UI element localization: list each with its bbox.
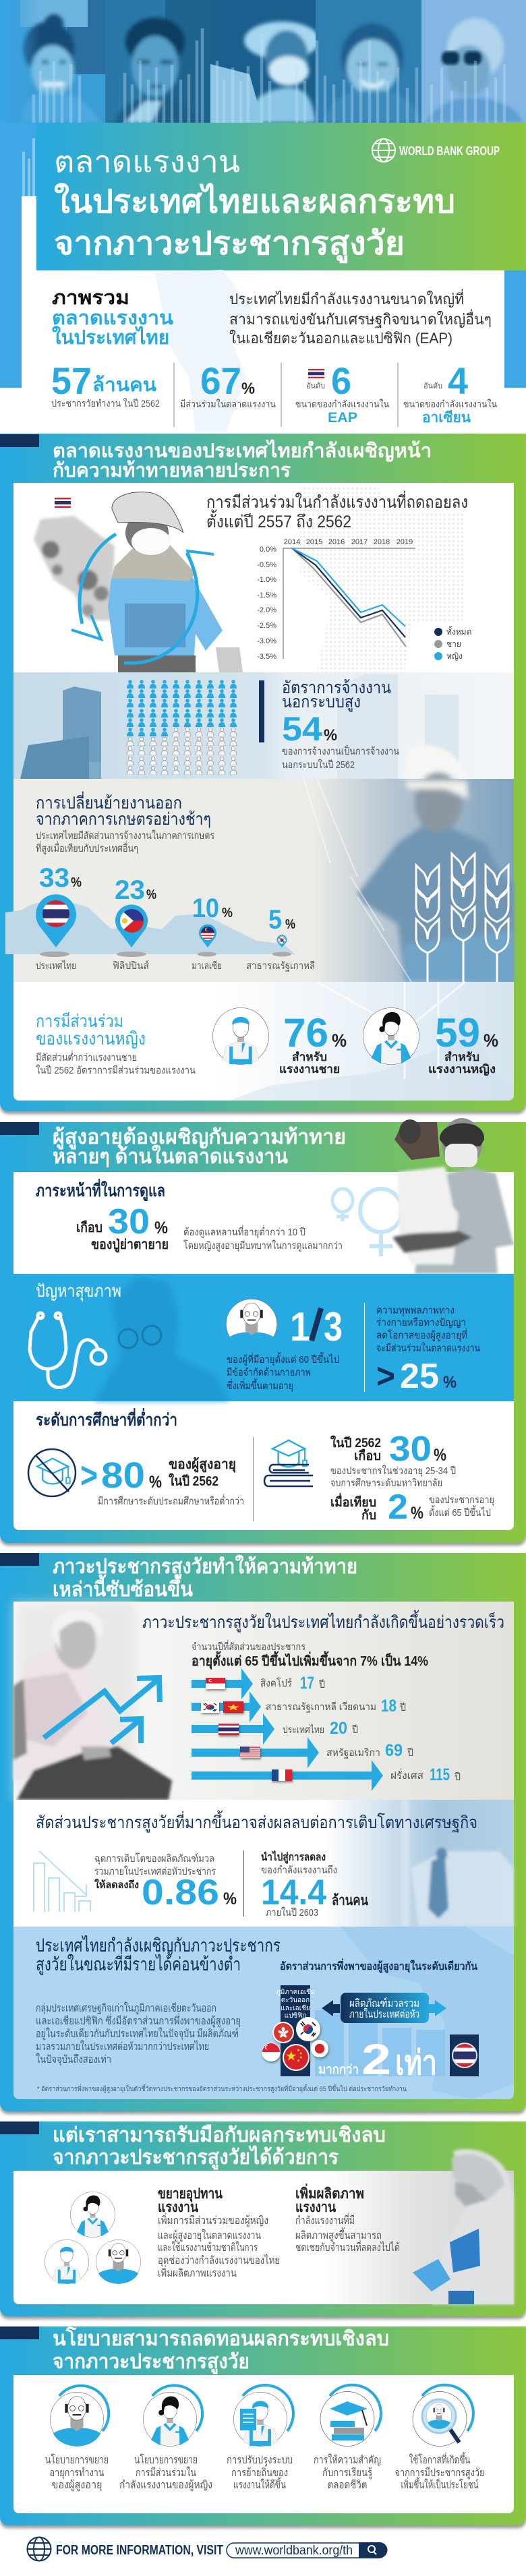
- stat: rank 6 in EAP: EAP: [328, 410, 357, 426]
- policy: women's participation: การมีส่วนร่วมใน: [136, 2466, 196, 2479]
- informal employment text: [282, 678, 399, 771]
- stat: nearly 30% of grandparents: เกือบ: [76, 1220, 103, 1235]
- pin: Korea 5%: %: [285, 917, 295, 932]
- search pill: www.worldbank.org/th: [235, 2544, 353, 2558]
- panel: lower education: ระดับการศึกษาที่ต่ำกว่า: [36, 1408, 177, 1430]
- stat: male 76%: 76: [283, 1010, 328, 1055]
- ageing subtitle: จำนวนปีที่สัดส่วนของประชากร: [192, 1639, 305, 1653]
- section heading: ผู้สูงอายุต้องเผชิญกับความท้าทาย: [53, 1126, 346, 1150]
- policy: improve migration: การย้ายถิ่นของ: [231, 2465, 288, 2479]
- icon: wheat stalks: [416, 854, 508, 982]
- comparison graphic: GDP per capita 2x: มากกว่า: [318, 2063, 359, 2077]
- overview heading: ตลาดแรงงาน: [52, 308, 173, 329]
- stat: 67 percent: [180, 359, 276, 409]
- stat: workforce down 14.4 million: 14.4: [261, 1873, 326, 1912]
- arrow row: Korea and Vietnam 18 years: [192, 1691, 406, 1722]
- text: expand labour supply: และผู้สูงอายุในตลาดแรงงาน: [158, 2229, 261, 2242]
- stat: 30% vs 2%: ในปี 2562: [330, 1435, 381, 1451]
- informal employment text: ของการจ้างงานเป็นการจ้างงาน: [282, 744, 399, 757]
- section frame: policies: [0, 2326, 526, 2525]
- pin: Malaysia 10%: มาเลเซีย: [192, 960, 222, 972]
- text: expand labour supply: และใช้แรงงานข้ามชาติในการ: [158, 2241, 258, 2254]
- stat: 30% vs 2%: %: [411, 1504, 423, 1523]
- body text: และเอเชียแปซิฟิก ซึ่งมีอัตราส่วนการพึ่งพาของผู้สูงอายุ: [36, 2013, 241, 2028]
- stat: 30% vs 2%: ของประชากรอายุ: [429, 1494, 494, 1506]
- comparison graphic: GDP per capita 2x: เท่า: [395, 2044, 437, 2082]
- agriculture text: จากภาคการเกษตรอย่างช้าๆ: [36, 810, 211, 829]
- section frame: ageing makes challenges more complex: [0, 1553, 526, 2111]
- ageing subtitle: [192, 1639, 428, 1670]
- map watermark: [155, 270, 253, 432]
- icon: no graduation cap: [28, 1449, 76, 1496]
- footer: FOR MORE INFORMATION, VISIT: [56, 2543, 223, 2558]
- pin: Thailand 33%: %: [71, 875, 82, 890]
- chart legend: [434, 626, 471, 661]
- policy: extend working age: นโยบายการขยาย: [45, 2453, 109, 2466]
- stat: over 80%: [80, 1455, 244, 1507]
- chart title: การมีส่วนร่วมในกำลังแรงงานที่ถดถอยลง: [206, 490, 468, 512]
- photo: masked woman with hat: [210, 0, 320, 123]
- informal employment text: นอกระบบสูง: [282, 693, 361, 712]
- section heading: ตลาดแรงงานของประเทศไทยกำลังเผชิญหน้า: [53, 439, 432, 463]
- line chart: -3.5%: [257, 653, 276, 661]
- line chart: 2018: [374, 538, 390, 546]
- policy: extend working age: [45, 2386, 109, 2492]
- panel: care duties: ต้องดูแลหลานที่อายุต่ำกว่า 10 ปี: [183, 1225, 305, 1239]
- stat: one third: ซึ่งเพิ่มขึ้นตามอายุ: [227, 1378, 293, 1393]
- arrow row: Korea and Vietnam 18 years: 18: [381, 1697, 397, 1716]
- title text: [54, 146, 455, 264]
- text: expand labour supply: แรงงาน: [158, 2200, 199, 2215]
- policy: improve migration: การปรับปรุงระบบ: [227, 2455, 293, 2467]
- overview text: [229, 289, 492, 347]
- stat: 67 percent: 67: [200, 359, 241, 402]
- pin: Philippines 23%: %: [146, 887, 156, 902]
- section heading: กับความท้าทายหลายประการ: [53, 460, 291, 481]
- pin: Thailand 33%: 33: [39, 863, 69, 893]
- logo: World Bank Group: [372, 139, 500, 162]
- line chart: -1.0%: [257, 576, 276, 584]
- body text: [36, 2001, 241, 2066]
- panel: health problems: [13, 1274, 514, 1401]
- text: raise productivity: แรงงาน: [295, 2200, 337, 2215]
- panel: declining participation: [13, 483, 514, 672]
- policy: lifelong learning: การให้ความสำคัญ: [314, 2453, 381, 2466]
- line chart: -2.0%: [257, 606, 276, 614]
- stat: 30% vs 2%: 2: [388, 1488, 408, 1527]
- line chart: 2017: [351, 538, 368, 546]
- icons: woman, migrant worker, older man: [45, 2192, 141, 2284]
- section frame: responding to ageing: [0, 2121, 526, 2316]
- panel: care duties: โดยหญิงสูงอายุมีบทบาทในการดูแลมากกว่า: [183, 1239, 343, 1252]
- stat: female 59%: %: [484, 1030, 498, 1051]
- section heading: แต่เราสามารถรับมือกับผลกระทบเชิงลบ: [53, 2124, 386, 2146]
- stat: female 59%: สำหรับ: [444, 1051, 479, 1063]
- arrow row: Thailand 20 years: [192, 1714, 358, 1745]
- section heading: [53, 1554, 357, 1601]
- stat: 30% vs 2%: ของประชากรในช่วงอายุ 25-34 ปี: [330, 1465, 456, 1477]
- section heading: [53, 2326, 389, 2374]
- chart title: ตั้งแต่ปี 2557 ถึง 2562: [206, 509, 351, 531]
- agriculture text: [36, 791, 214, 854]
- stat: 57 million: 57: [51, 359, 92, 402]
- photo: elderly woman: [316, 0, 421, 123]
- policy: seize opportunities: เพิ่มขึ้นให้เป็นประโยชน์: [401, 2477, 479, 2491]
- icon: stethoscope: [30, 1313, 106, 1387]
- stat: female 59%: 59: [435, 1010, 480, 1055]
- stat: GDP growth 0.86%: %: [223, 1890, 237, 1908]
- stat: GDP growth 0.86%: รวมภายในประเทศต่อหัวประชากร: [94, 1865, 216, 1877]
- Thailand block: [450, 2035, 479, 2076]
- panel: lower education: [28, 1408, 494, 1527]
- arrow row: Singapore 17 years: ปี: [318, 1679, 325, 1691]
- stat: 57 million: ประชากรวัยทำงาน ในปี 2562: [51, 398, 160, 409]
- stat: rank 4 in ASEAN: [403, 359, 497, 426]
- stat: male 76%: %: [332, 1030, 347, 1051]
- section heading: ภาวะประชากรสูงวัยทำให้ความท้าทาย: [53, 1554, 357, 1579]
- stat: 30% vs 2%: จบการศึกษาระดับมหาวิทยาลัย: [330, 1477, 442, 1489]
- stat: 30% vs 2%: %: [434, 1446, 446, 1465]
- title banner: [36, 123, 526, 270]
- stat: workforce down 14.4 million: ล้านคน: [332, 1892, 369, 1908]
- panel: negative impact on growth: [13, 1800, 514, 1927]
- policy: women's participation: นโยบายการขยาย: [134, 2453, 198, 2466]
- text: raise productivity: [295, 2183, 400, 2254]
- stat: over 80%: ในปี 2562: [169, 1473, 218, 1489]
- stat: over 80%: มีการศึกษาระดับประถมศึกษาหรือต่ำกว่า: [98, 1494, 244, 1507]
- ageing subtitle: อายุตั้งแต่ 65 ปีขึ้นไปเพิ่มขึ้นจาก 7% เป็น 14%: [192, 1651, 428, 1670]
- text: expand labour supply: เพิ่มผลิตภาพแรงงาน: [158, 2265, 237, 2279]
- section heading: จากภาวะประชากรสูงวัยได้ด้วยการ: [53, 2145, 339, 2170]
- body text: ในปัจจุบันถึงสองเท่า: [36, 2053, 111, 2066]
- heading: [36, 1935, 281, 1975]
- policy: lifelong learning: [314, 2385, 381, 2491]
- stat: over 25%: [376, 1305, 480, 1396]
- stat: rank 6 in EAP: 6: [331, 359, 351, 402]
- icon: globe: [27, 2537, 51, 2561]
- icon: Thai flag: [55, 498, 71, 508]
- stat: 30% vs 2%: เกือบ: [354, 1448, 381, 1463]
- policy: lifelong learning: กับการเรียนรู้: [322, 2467, 372, 2480]
- stat: 30% vs 2%: 30: [389, 1430, 432, 1469]
- stat: over 80%: ของผู้สูงอายุ: [169, 1457, 236, 1473]
- stat: one third: ของผู้ที่มีอายุตั้งแต่ 60 ปีขึ้นไป: [227, 1352, 339, 1366]
- icon: falling bars: [34, 1851, 90, 1912]
- agriculture text: การเปลี่ยนย้ายงานออก: [36, 791, 182, 813]
- text: raise productivity: กำลังแรงงานที่มี: [295, 2213, 355, 2227]
- stat: rank 4 in ASEAN: 4: [448, 359, 468, 402]
- overview text: ประเทศไทยมีกำลังแรงงานขนาดใหญ่ที่: [229, 289, 464, 308]
- photo: cleanroom worker: [413, 2149, 514, 2304]
- section frame: challenges for older people: [0, 1122, 526, 1543]
- policy: seize opportunities: [395, 2385, 484, 2491]
- stat: GDP growth 0.86%: [94, 1852, 237, 1912]
- comparison graphic: GDP per capita 2x: และเอเชีย: [281, 2004, 310, 2012]
- title text: จากภาวะประชากรสูงวัย: [54, 226, 405, 264]
- agriculture text: ประเทศไทยมีสัดส่วนการจ้างงานในภาคการเกษตร: [36, 829, 214, 842]
- panel: care duties: [36, 1118, 516, 1274]
- stat: rank 4 in ASEAN: อันดับ: [423, 381, 442, 390]
- double arrow pill: [322, 1993, 446, 2023]
- stat: one third: มีข้อจำกัดด้านกายภาพ: [227, 1367, 311, 1378]
- photo: factory worker and car: [401, 1800, 514, 1927]
- policy: extend working age: อายุการทำงาน: [50, 2467, 105, 2480]
- stat: one third: 3: [324, 1304, 343, 1349]
- section heading: [53, 1126, 346, 1168]
- text: raise productivity: ผลิตภาพสูงขึ้นสามารถ: [295, 2227, 382, 2242]
- hero: photo band of five workers: [0, 0, 526, 196]
- stat: over 25%: ความทุพพลภาพทาง: [376, 1305, 455, 1317]
- stat: rank 6 in EAP: อันดับ: [306, 381, 325, 390]
- line chart: -2.5%: [257, 622, 276, 630]
- arrow row: USA 69 years: [192, 1737, 413, 1768]
- mountain backdrop: [5, 900, 295, 954]
- photo: elderly man with sunglasses: [421, 0, 526, 123]
- stat: 57 million: ล้านคน: [92, 374, 156, 395]
- stat: over 80%: %: [149, 1473, 162, 1492]
- section heading: นโยบายสามารถลดทอนผลกระทบเชิงลบ: [53, 2326, 389, 2350]
- overview heading: ภาพรวม: [52, 287, 129, 309]
- text: expand labour supply: อุดช่องว่างกำลังแรงงานของไทย: [158, 2254, 280, 2267]
- participation text: การมีส่วนร่วม: [36, 1011, 123, 1031]
- arrow row: USA 69 years: สหรัฐอเมริกา: [326, 1747, 380, 1759]
- stat: over 80%: 80: [101, 1455, 145, 1496]
- panel: ageing at low income: [13, 1927, 514, 2099]
- informal employment text: อัตราการจ้างงาน: [282, 678, 391, 697]
- comparison graphic: GDP per capita 2x: ภูมิภาคเอเชีย: [276, 1988, 315, 1996]
- panel: expand labour supply and productivity: [13, 2149, 514, 2304]
- photo: grandmother carrying child: [392, 1118, 516, 1274]
- overview heading: [52, 287, 173, 349]
- stat: over 25%: >: [376, 1357, 395, 1396]
- policy: improve migration: แรงงานให้ดีขึ้น: [233, 2477, 286, 2491]
- panel: health problems: ปัญหาสุขภาพ: [36, 1281, 121, 1301]
- stat: nearly 30% of grandparents: 30: [108, 1202, 150, 1241]
- section heading: จากภาวะประชากรสูงวัย: [53, 2351, 250, 2374]
- pin: Thailand 33%: [36, 863, 82, 972]
- photo: worker with fishing net: [34, 492, 243, 672]
- pin: Korea 5%: 5: [268, 905, 282, 935]
- photo: elderly farmer: [303, 773, 514, 982]
- body text: อยู่ในระดับเดียวกันกับประเทศไทยในปัจจุบัน มีผลิตภัณฑ์: [36, 2027, 239, 2041]
- policy: women's participation: กำลังแรงงานของผู้หญิง: [119, 2479, 212, 2492]
- pin: Philippines 23%: [113, 875, 156, 972]
- comparison graphic: GDP per capita 2x: แปซิฟิก: [285, 2012, 306, 2020]
- arrow row: USA 69 years: ปี: [407, 1747, 413, 1759]
- text: raise productivity: เพิ่มผลิตภาพ: [295, 2183, 364, 2202]
- arrow row: USA 69 years: 69: [385, 1741, 403, 1760]
- photo: elderly man in blue tint: [94, 1278, 229, 1401]
- stat: GDP growth 0.86%: ให้ลดลงถึง: [94, 1879, 139, 1891]
- line chart: [257, 538, 471, 661]
- comparison graphic: GDP per capita 2x: 2: [361, 2035, 391, 2084]
- line chart: 2015: [306, 538, 322, 546]
- participation text: ในปี 2562 อัตราการมีส่วนร่วมของแรงงาน: [36, 1064, 196, 1076]
- stat: over 25%: %: [443, 1373, 457, 1392]
- pin: Malaysia 10%: %: [222, 906, 233, 920]
- stat: workforce down 14.4 million: ของกำลังแรงงานถึง: [261, 1865, 337, 1876]
- stat: rank 6 in EAP: [295, 359, 389, 426]
- stat: 30% vs 2%: [330, 1430, 494, 1527]
- photo: man with white head cloth: [403, 745, 467, 779]
- stat: male 76%: [212, 1007, 347, 1076]
- panel: slow shift out of agriculture: [5, 773, 514, 982]
- section heading: หลายๆ ด้านในตลาดแรงงาน: [53, 1144, 288, 1168]
- photo: elderly woman seated: [13, 1602, 172, 1800]
- side colour bars: [0, 123, 526, 388]
- policy: improve migration: [227, 2385, 293, 2491]
- stat: workforce down 14.4 million: ภายในปี 2603: [266, 1906, 318, 1919]
- pin: Malaysia 10%: [192, 898, 232, 969]
- overview text: สามารถแข่งขันกับเศรษฐกิจขนาดใหญ่อื่นๆ: [229, 309, 492, 328]
- panel: care duties: ภาระหน้าที่ในการดูแล: [36, 1179, 165, 1202]
- pin: Malaysia 10%: 10: [192, 894, 219, 923]
- text: raise productivity: ชดเชยกับจำนวนที่ลดลงไปได้: [295, 2240, 400, 2254]
- stat: nearly 30% of grandparents: ของปู่ย่าตายาย: [91, 1237, 169, 1254]
- panel: female labour participation: [13, 982, 514, 1101]
- line chart: 2019: [397, 538, 413, 546]
- participation text: [36, 1011, 196, 1076]
- arrow row: Singapore 17 years: 17: [300, 1674, 314, 1693]
- stat: nearly 30% of grandparents: [76, 1202, 169, 1254]
- text: expand labour supply: [158, 2186, 280, 2279]
- arrow row: Korea and Vietnam 18 years: สาธารณรัฐเกาหลี เวียดนาม: [266, 1701, 376, 1713]
- participation text: ของแรงงานหญิง: [36, 1028, 146, 1049]
- title text: ตลาดแรงงาน: [54, 146, 240, 179]
- stat: workforce down 14.4 million: นำไปสู่การลดลง: [261, 1850, 326, 1865]
- chart legend: ทั้งหมด: [446, 626, 471, 637]
- arrow row: France 115 years: ฝรั่งเศส: [390, 1768, 423, 1782]
- stat: GDP growth 0.86%: ฉุดการเติบโตของผลิตภัณฑ์มวล: [94, 1852, 214, 1865]
- pin: Korea 5%: [246, 905, 315, 972]
- panel: rapid ageing in Thailand: [13, 1602, 514, 1800]
- stat: 67 percent: %: [241, 380, 255, 398]
- section heading: [53, 2124, 386, 2170]
- heading: สูงวัยในขณะที่มีรายได้ค่อนข้างต่ำ: [36, 1952, 241, 1975]
- chart title: [206, 490, 468, 531]
- text: expand labour supply: เพิ่มการมีส่วนร่วมของผู้หญิง: [158, 2213, 268, 2227]
- stat: one third: 1: [290, 1304, 310, 1349]
- panel: informal employment: [13, 672, 514, 779]
- stat: over 25%: ร่างกายหรือทางปัญญา: [376, 1317, 466, 1328]
- stat: one third: [226, 1299, 343, 1393]
- photo: man: [105, 0, 210, 123]
- stat: over 25%: 25: [400, 1357, 439, 1396]
- section frame: labour market challenges: [0, 434, 526, 1111]
- icon: rising arrows: [44, 1678, 160, 1743]
- double arrow pill: ภายในประเทศต่อหัว: [349, 2008, 419, 2020]
- text: expand labour supply: ขยายอุปทาน: [158, 2186, 223, 2203]
- body text: มวลรวมภายในประเทศต่อหัวมากกว่าประเทศไทย: [36, 2040, 209, 2053]
- line chart: -1.5%: [257, 591, 276, 599]
- participation text: มีสัดส่วนต่ำกว่าแรงงานชาย: [36, 1050, 137, 1063]
- stat: over 80%: >: [80, 1455, 98, 1496]
- chart legend: หญิง: [446, 651, 463, 661]
- comparison graphic: GDP per capita 2x: [262, 1985, 479, 2084]
- icon: graduation cap and books: [264, 1440, 313, 1486]
- line chart: -0.5%: [257, 561, 276, 569]
- footer: [27, 2537, 387, 2561]
- arrow row: France 115 years: 115: [430, 1765, 450, 1784]
- arrow row: Thailand 20 years: ปี: [351, 1724, 358, 1736]
- arrow row: Thailand 20 years: ประเทศไทย: [283, 1724, 324, 1736]
- stat: over 25%: ลดโอกาสของผู้สูงอายุที่: [376, 1328, 467, 1342]
- stat: nearly 30% of grandparents: %: [154, 1219, 168, 1237]
- line chart: -3.0%: [257, 637, 276, 645]
- informal employment text: นอกระบบในปี 2562: [282, 759, 355, 771]
- icon: female symbols: [332, 1189, 402, 1256]
- heading: ประเทศไทยกำลังเผชิญกับภาวะประชากร: [36, 1935, 281, 1956]
- arrow row: France 115 years: ปี: [454, 1772, 461, 1783]
- arrow row: Singapore 17 years: [192, 1668, 325, 1699]
- body text: กลุ่มประเทศเศรษฐกิจเก่าในภูมิภาคเอเชียตะวันออก: [36, 2001, 216, 2015]
- comparison graphic: GDP per capita 2x: ตะวันออก: [281, 1997, 310, 2004]
- policy: seize opportunities: ใช้โอกาสที่เกิดขึ้น: [409, 2452, 471, 2466]
- policy: extend working age: ของผู้สูงอายุ: [51, 2479, 103, 2492]
- double arrow pill: ผลิตภัณฑ์มวลรวม: [349, 1997, 419, 2010]
- overview text: ในเอเชียตะวันออกและแปซิฟิก (EAP): [229, 330, 452, 347]
- policy: lifelong learning: ตลอดชีวิต: [328, 2479, 367, 2491]
- section heading: [53, 439, 432, 481]
- pin: Korea 5%: สาธารณรัฐเกาหลี: [246, 960, 315, 972]
- stat: 57 million: [51, 359, 160, 409]
- section heading: เหล่านี้ซับซ้อนขึ้น: [53, 1574, 193, 1601]
- photo: Bangkok skyscrapers: [20, 686, 101, 779]
- overview heading: ในประเทศไทย: [52, 326, 169, 349]
- arrow row: France 115 years: [192, 1760, 461, 1791]
- agriculture text: ที่สูงเมื่อเทียบกับประเทศอื่นๆ: [36, 841, 138, 854]
- informal employment text: %: [324, 726, 337, 744]
- stat: rank 4 in ASEAN: ขนาดของกำลังแรงงานใน: [403, 399, 497, 409]
- stat: workforce down 14.4 million: [261, 1850, 369, 1919]
- arrow row: Korea and Vietnam 18 years: ปี: [399, 1702, 406, 1714]
- stat: 30% vs 2%: กับ: [361, 1509, 376, 1523]
- informal employment text: 54: [282, 710, 322, 748]
- policy: women's participation: [119, 2385, 212, 2492]
- stat: female 59%: แรงงานหญิง: [428, 1063, 496, 1076]
- flags: high-income comparators: [262, 2017, 328, 2071]
- stat: GDP growth 0.86%: 0.86: [142, 1873, 219, 1912]
- stat: over 25%: จะมีส่วนร่วมในตลาดแรงงาน: [376, 1342, 480, 1354]
- pin: Philippines 23%: 23: [115, 875, 145, 905]
- chart heading: อัตราส่วนการพึ่งพาของผู้สูงอายุในระดับเดียวกัน: [280, 1958, 477, 1974]
- stat: male 76%: แรงงานชาย: [279, 1063, 340, 1076]
- title text: ในประเทศไทยและผลกระทบ: [54, 182, 455, 220]
- stat: 30% vs 2%: เมื่อเทียบ: [330, 1493, 376, 1510]
- stat: rank 4 in ASEAN: อาเซียน: [422, 409, 471, 426]
- footnote: * อัตราส่วนการพึ่งพาของผู้สูงอายุเป็นตัวชี้วัดทางประชากรของอัตราส่วนระหว่างประชากรสูงวัยที่มีอายุตั้งแต่ 65 ปีขึ้นไป ต่อประชากรวัยทำงาน: [37, 2084, 407, 2093]
- pin: Philippines 23%: ฟิลิปปินส์: [113, 960, 149, 972]
- stat: 30% vs 2%: ตั้งแต่ 65 ปีขึ้นไป: [429, 1505, 491, 1519]
- pin: Thailand 33%: ประเทศไทย: [36, 960, 76, 972]
- stat: female 59%: [363, 1007, 498, 1076]
- line chart: 0.0%: [260, 546, 276, 554]
- stat: male 76%: สำหรับ: [292, 1051, 327, 1063]
- arrow row: Thailand 20 years: 20: [330, 1719, 347, 1738]
- stat: rank 6 in EAP: ขนาดของกำลังแรงงานใน: [295, 399, 389, 409]
- policy: seize opportunities: จากการมีประชากรสูงวัย: [395, 2467, 484, 2480]
- stat: 67 percent: มีส่วนร่วมในตลาดแรงงาน: [180, 399, 276, 409]
- chart legend: ชาย: [446, 639, 461, 649]
- arrow row: Singapore 17 years: สิงคโปร์: [260, 1677, 292, 1689]
- line chart: 2014: [284, 538, 300, 546]
- photo: woman smiling: [0, 0, 105, 123]
- pictogram: 54 of 100: [127, 680, 237, 775]
- line chart: 2016: [328, 538, 345, 546]
